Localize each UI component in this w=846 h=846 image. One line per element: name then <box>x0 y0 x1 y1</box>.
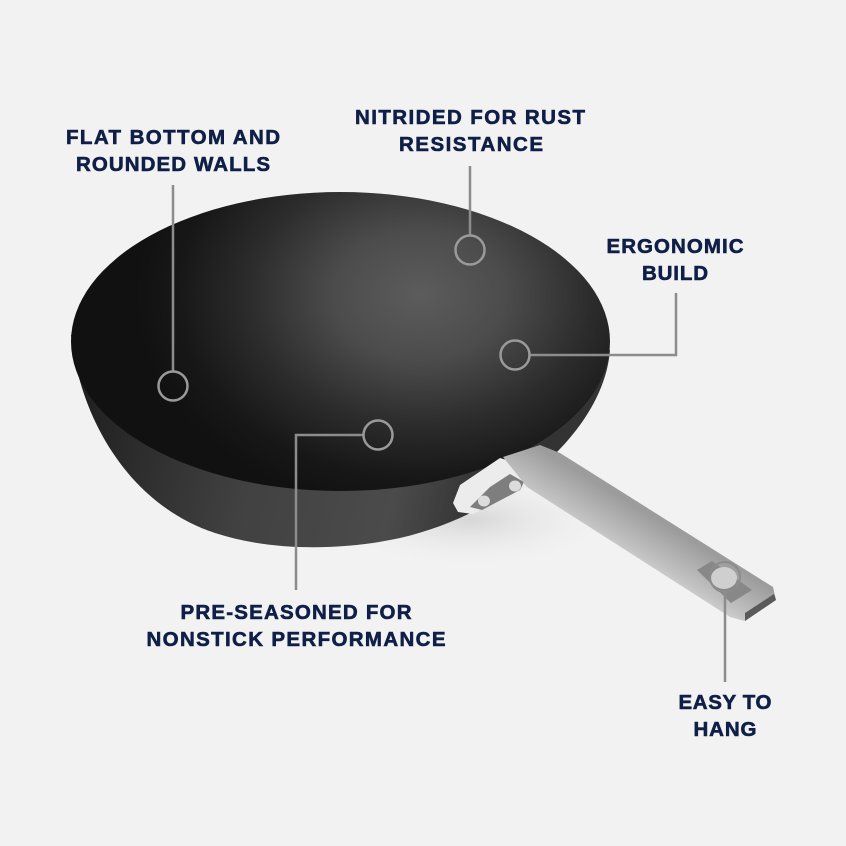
leader line <box>469 166 471 236</box>
wok pan <box>71 192 610 547</box>
marker <box>710 562 740 592</box>
label: PRE-SEASONED FOR <box>180 601 412 624</box>
callout: easy to hang <box>678 562 772 741</box>
handle bar <box>503 445 776 621</box>
handle tip <box>745 594 776 621</box>
label line 2: RESISTANCE <box>399 133 543 156</box>
leader line <box>296 435 363 590</box>
label line 2: NONSTICK PERFORMANCE <box>146 628 446 651</box>
handle <box>453 445 776 621</box>
hanging hole <box>697 561 752 603</box>
bracket opening <box>470 474 524 510</box>
leader line <box>530 293 676 355</box>
pan shadow <box>320 470 620 570</box>
label: NITRIDED FOR RUST <box>355 106 585 129</box>
pan outer body <box>71 300 610 547</box>
label line 2: HANG <box>694 718 756 741</box>
leader line <box>172 185 174 372</box>
marker <box>158 372 188 400</box>
callout: nitrided <box>355 106 585 264</box>
rivet <box>509 480 521 492</box>
leader line <box>724 592 726 682</box>
rivet <box>478 496 490 506</box>
pan interior <box>71 192 610 491</box>
marker <box>456 236 484 264</box>
label line 2: BUILD <box>642 262 708 285</box>
marker <box>500 340 530 370</box>
marker <box>364 420 392 450</box>
hanging hole highlight <box>711 567 737 589</box>
callout: ergonomic <box>500 235 744 370</box>
bracket <box>453 458 540 514</box>
callout: pre-seasoned <box>146 420 446 651</box>
label line 2: ROUNDED WALLS <box>76 153 270 176</box>
label: ERGONOMIC <box>606 235 744 258</box>
label: EASY TO <box>678 691 772 714</box>
callout: flat bottom <box>66 126 280 400</box>
label: FLAT BOTTOM AND <box>66 126 280 149</box>
